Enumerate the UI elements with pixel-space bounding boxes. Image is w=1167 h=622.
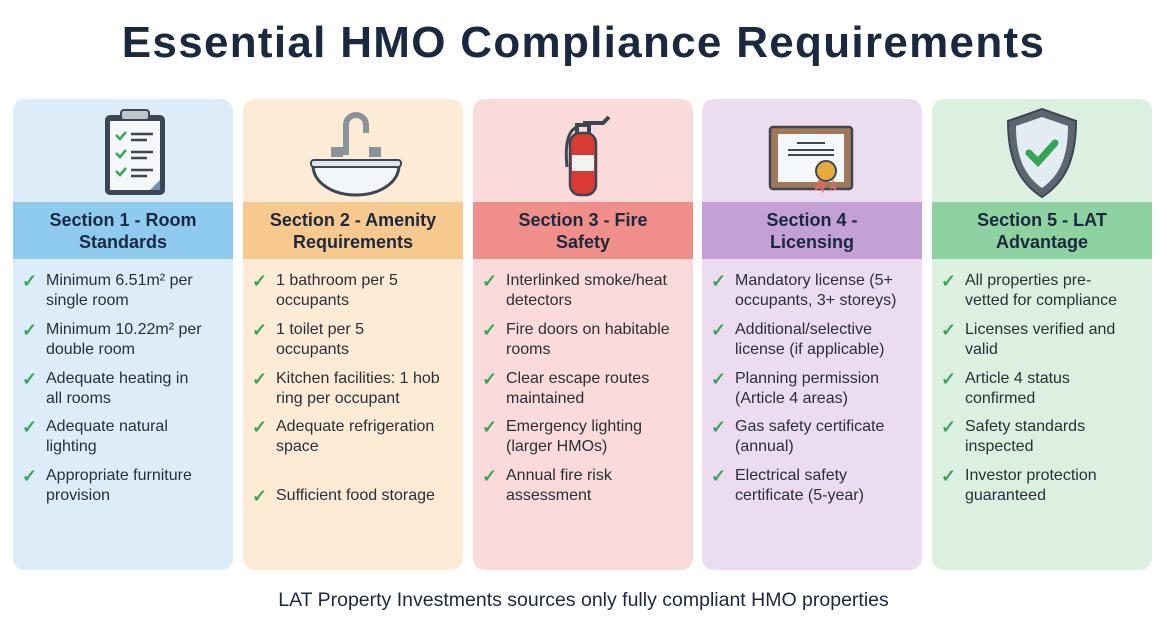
panel: section 1 room standards: Adequate heating in	[46, 370, 188, 387]
panel: section 2 amenity: Kitchen facilities: 1 hob	[276, 370, 440, 387]
panel: section 5 LAT advantage: Investor protection	[965, 467, 1097, 484]
panel: section 3 fire safety: ✓	[482, 320, 497, 340]
header: Standards	[79, 232, 167, 252]
panel: section 1 room standards: ✓	[22, 271, 37, 291]
footer: LAT Property Investments sources only fully compliant HMO properties	[278, 589, 889, 611]
panel: section 4 licensing: Planning permission	[735, 370, 879, 387]
header	[13, 202, 233, 259]
panel: section 2 amenity: ✓	[252, 369, 267, 389]
bullet list	[22, 271, 202, 504]
header: Requirements	[293, 232, 413, 252]
panel: section 5 LAT advantage: guaranteed	[965, 487, 1046, 504]
panel: section 2 amenity: 1 toilet per 5	[276, 321, 364, 338]
header: Section 1 - Room	[49, 210, 196, 230]
panel: section 4 licensing	[702, 99, 922, 570]
panel: section 4 licensing: ✓	[711, 417, 726, 437]
panel: section 4 licensing: certificate (5-year)	[735, 487, 864, 504]
panel: section 2 amenity: ring per occupant	[276, 390, 400, 407]
panel: section 2 amenity: ✓	[252, 486, 267, 506]
header: Advantage	[996, 232, 1088, 252]
panel: section 3 fire safety: detectors	[506, 292, 572, 309]
header	[473, 202, 693, 259]
panel: section 1 room standards: ✓	[22, 417, 37, 437]
panel: section 3 fire safety: ✓	[482, 466, 497, 486]
panel: section 2 amenity: ✓	[252, 417, 267, 437]
icon: shield	[1007, 108, 1077, 198]
panel: section 4 licensing: Additional/selective	[735, 321, 872, 338]
panel: section 4 licensing: ✓	[711, 271, 726, 291]
panel: section 2 amenity: space	[276, 438, 319, 455]
panel: section 2 amenity: occupants	[276, 292, 349, 309]
panel: section 4 licensing: (Article 4 areas)	[735, 390, 848, 407]
panel: section 1 room standards: Adequate natural	[46, 418, 168, 435]
header: Safety	[556, 232, 610, 252]
panel: section 1 room standards: single room	[46, 292, 129, 309]
icon: sink	[310, 112, 402, 196]
panel: section 5 LAT advantage: valid	[965, 341, 998, 358]
panel: section 3 fire safety: Emergency lighting	[506, 418, 642, 435]
panel: section 2 amenity: 1 bathroom per 5	[276, 272, 398, 289]
header: Licensing	[770, 232, 854, 252]
header: Section 5 - LAT	[977, 210, 1107, 230]
title: Essential HMO Compliance Requirements	[122, 18, 1045, 67]
panel: section 5 LAT advantage: Licenses verified and	[965, 321, 1115, 338]
panel: section 5 LAT advantage: ✓	[941, 417, 956, 437]
panel: section 5 LAT advantage: All properties pre-	[965, 272, 1091, 289]
panel: section 3 fire safety: ✓	[482, 271, 497, 291]
panel: section 2 amenity: ✓	[252, 271, 267, 291]
panel: section 3 fire safety: ✓	[482, 417, 497, 437]
panel: section 3 fire safety: Clear escape routes	[506, 370, 649, 387]
panel: section 4 licensing: ✓	[711, 466, 726, 486]
panel: section 5 LAT advantage: inspected	[965, 438, 1034, 455]
panel: section 3 fire safety: assessment	[506, 487, 591, 504]
panel: section 5 LAT advantage: ✓	[941, 369, 956, 389]
panel: section 2 amenity: Sufficient food storage	[276, 487, 435, 504]
header: Section 3 - Fire	[518, 210, 648, 230]
panel: section 2 amenity: Adequate refrigeration	[276, 418, 434, 435]
panel: section 1 room standards: provision	[46, 487, 110, 504]
panel: section 4 licensing: (annual)	[735, 438, 794, 455]
panel: section 5 LAT advantage: Safety standards	[965, 418, 1085, 435]
header: Section 4 -	[766, 210, 858, 230]
icon: fire extinguisher	[564, 116, 610, 196]
panel: section 5 LAT advantage: vetted for compliance	[965, 292, 1117, 309]
panel: section 1 room standards: ✓	[22, 369, 37, 389]
panel: section 1 room standards: lighting	[46, 438, 97, 455]
icon: clipboard	[105, 109, 165, 195]
panel: section 3 fire safety: rooms	[506, 341, 550, 358]
header: Section 2 - Amenity	[270, 210, 436, 230]
panel: section 1 room standards: all rooms	[46, 390, 111, 407]
panel: section 1 room standards: Appropriate furniture	[46, 467, 192, 484]
panel: section 1 room standards	[13, 99, 233, 570]
panel: section 2 amenity: occupants	[276, 341, 349, 358]
panel: section 4 licensing: occupants, 3+ storeys)	[735, 292, 896, 309]
bullet list	[941, 271, 1117, 504]
panel: section 1 room standards: Minimum 10.22m² per	[46, 321, 202, 338]
panel: section 5 LAT advantage: ✓	[941, 466, 956, 486]
icon: certificate	[768, 126, 854, 193]
panel: section 5 LAT advantage: confirmed	[965, 390, 1035, 407]
panel: section 3 fire safety: maintained	[506, 390, 584, 407]
panel: section 1 room standards: ✓	[22, 320, 37, 340]
panel: section 4 licensing: license (if applicable)	[735, 341, 884, 358]
bullet list	[252, 271, 440, 506]
panel: section 5 LAT advantage: ✓	[941, 271, 956, 291]
header	[243, 202, 463, 259]
panel: section 2 amenity	[243, 99, 463, 570]
panel: section 3 fire safety: Annual fire risk	[506, 467, 612, 484]
panel: section 3 fire safety: Interlinked smoke/heat	[506, 272, 667, 289]
panel: section 3 fire safety: (larger HMOs)	[506, 438, 607, 455]
panel: section 1 room standards: double room	[46, 341, 135, 358]
panel: section 2 amenity: ✓	[252, 320, 267, 340]
panel: section 5 LAT advantage: ✓	[941, 320, 956, 340]
panel: section 4 licensing: Gas safety certificate	[735, 418, 884, 435]
panel: section 4 licensing: Mandatory license (5+	[735, 272, 893, 289]
panel: section 1 room standards: Minimum 6.51m² per	[46, 272, 193, 289]
bullet list	[482, 271, 670, 504]
panel: section 1 room standards: ✓	[22, 466, 37, 486]
panel: section 4 licensing: ✓	[711, 320, 726, 340]
panel: section 4 licensing: ✓	[711, 369, 726, 389]
panel: section 3 fire safety	[473, 99, 693, 570]
bullet list	[711, 271, 896, 504]
panel: section 5 LAT advantage	[932, 99, 1152, 570]
panel: section 4 licensing: Electrical safety	[735, 467, 847, 484]
header	[702, 202, 922, 259]
panel: section 3 fire safety: Fire doors on habitable	[506, 321, 670, 338]
panel: section 3 fire safety: ✓	[482, 369, 497, 389]
header	[932, 202, 1152, 259]
panel: section 5 LAT advantage: Article 4 status	[965, 370, 1070, 387]
